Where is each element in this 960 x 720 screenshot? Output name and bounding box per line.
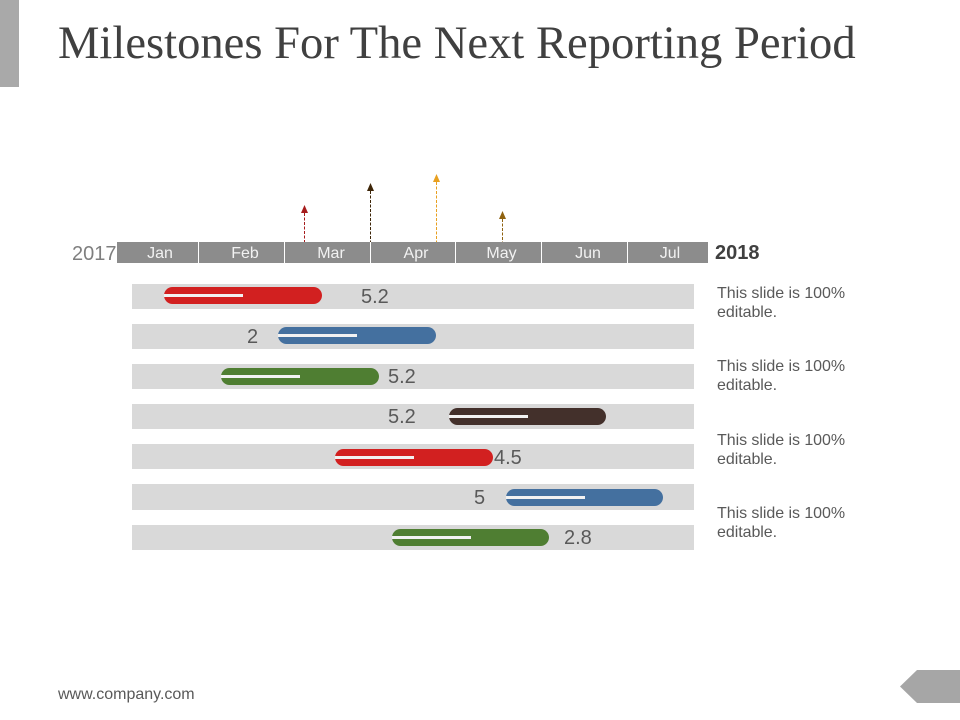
- note 2: This slide is 100%: [717, 358, 845, 375]
- note 3: This slide is 100%: [717, 432, 845, 449]
- row 6 value: 5: [474, 487, 485, 509]
- row 1 background: [132, 284, 694, 309]
- row 2 background: [132, 324, 694, 349]
- row 4 value: 5.2: [388, 406, 416, 428]
- note 3: [717, 432, 845, 468]
- note 1: This slide is 100%: [717, 285, 845, 302]
- row 5 background: [132, 444, 694, 469]
- note 1: editable.: [717, 304, 777, 321]
- row 1 bar: [164, 287, 322, 304]
- note 3: editable.: [717, 451, 777, 468]
- note 4: This slide is 100%: [717, 505, 845, 522]
- arrow: red: [301, 205, 308, 242]
- row 6 background: [132, 484, 694, 510]
- milestone arrows: [301, 174, 506, 242]
- month: Mar: Mar: [317, 245, 345, 262]
- next-page arrow tab: [900, 670, 960, 703]
- end year: 2018: [715, 242, 760, 264]
- month: Jan: Jan: [147, 245, 173, 262]
- row 7 background: [132, 525, 694, 550]
- footer url: www.company.com: [58, 686, 195, 703]
- row 2 bar: [278, 327, 436, 344]
- month: Jun: Jun: [575, 245, 601, 262]
- timeline band: [117, 242, 708, 263]
- month: Feb: Feb: [231, 245, 259, 262]
- row 4 background: [132, 404, 694, 429]
- row 3 bar: [221, 368, 379, 385]
- row 5 value: 4.5: [494, 447, 522, 469]
- note 2: editable.: [717, 377, 777, 394]
- row 1 value: 5.2: [361, 286, 389, 308]
- row 5 bar: [335, 449, 493, 466]
- title: Milestones For The Next Reporting Period: [58, 17, 856, 69]
- note 1: [717, 285, 845, 321]
- row 4 bar: [449, 408, 606, 425]
- row 6 bar: [506, 489, 663, 506]
- corner tab: [0, 0, 19, 87]
- row 2 value: 2: [247, 326, 258, 348]
- arrow: dark brown: [367, 183, 374, 242]
- arrow: orange: [433, 174, 440, 242]
- note 4: editable.: [717, 524, 777, 541]
- arrow: ochre: [499, 211, 506, 242]
- month: Jul: Jul: [660, 245, 680, 262]
- row 7 value: 2.8: [564, 527, 592, 549]
- note 4: [717, 505, 845, 541]
- row 3 background: [132, 364, 694, 389]
- row 3 value: 5.2: [388, 366, 416, 388]
- month: May: May: [486, 245, 517, 262]
- start year: 2017: [72, 243, 116, 265]
- row 7 bar: [392, 529, 549, 546]
- note 2: [717, 358, 845, 394]
- month: Apr: Apr: [404, 245, 428, 262]
